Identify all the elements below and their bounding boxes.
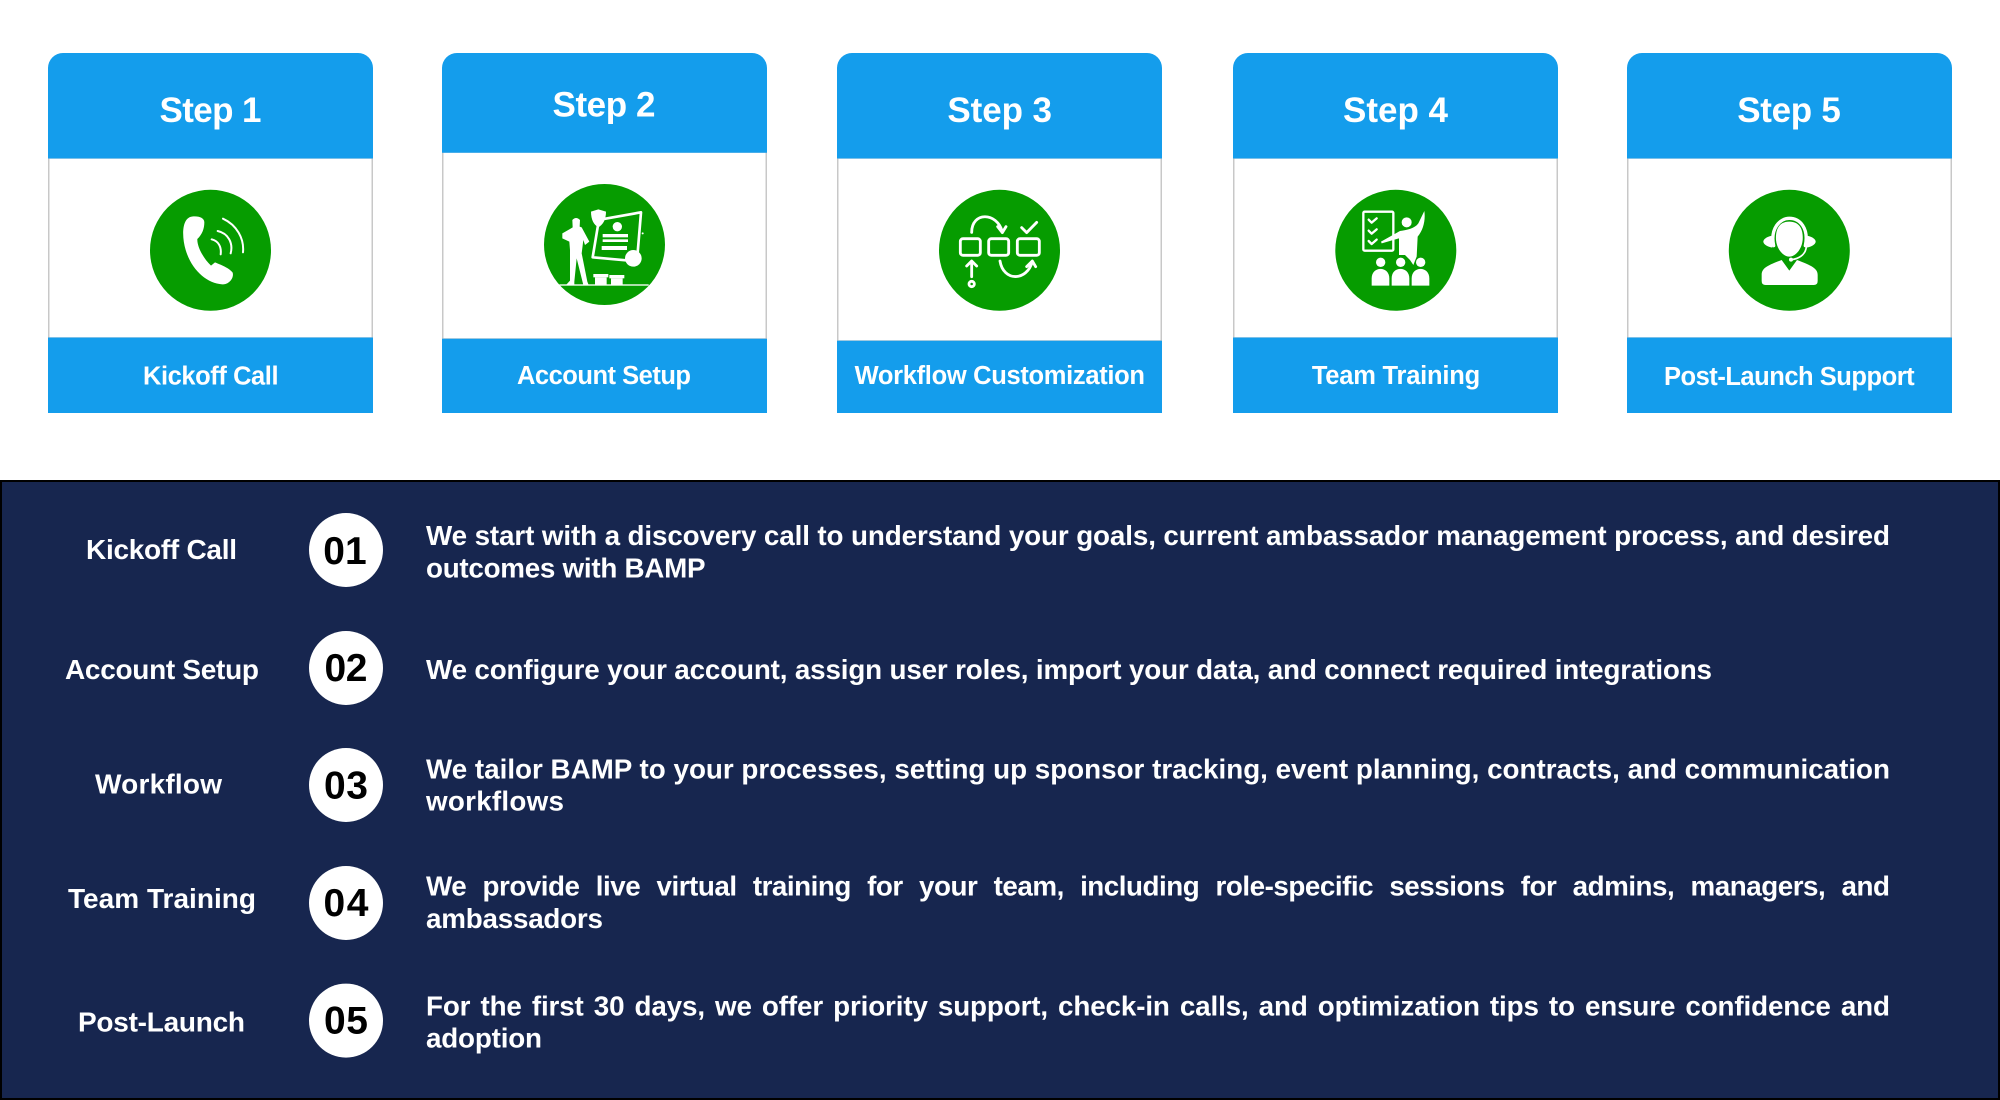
step 5 footer [1627,338,1952,413]
row 4: team training [68,866,1890,940]
panel: step 1 card [48,53,373,413]
row 1 description: We start with a discovery call to understand your goals, current ambassador management process, and desired [426,520,1890,551]
row 4 label: Team Training [68,883,256,914]
step 3 header: Step 3 [947,91,1052,130]
step 5 footer: Post-Launch Support [1664,363,1915,391]
step 4 footer [1233,338,1558,413]
step 3 footer [837,341,1162,413]
step 3 header [837,53,1162,158]
icon: workflow [939,190,1060,311]
row 5 description: For the first 30 days, we offer priority support, check-in calls, and optimization tips to ensure confidence and [426,990,1890,1021]
step 4 footer: Team Training [1312,362,1480,390]
row 3 description [425,753,1890,816]
row 5 number badge: 05 [324,1000,368,1042]
row 4 number badge: 04 [324,882,369,925]
icon: account setup [544,184,665,305]
step 2 footer [442,339,767,413]
row 1 number badge [309,513,383,587]
icon: team training [1335,190,1456,311]
row 2: account setup [65,631,1712,705]
row 5: post-launch [78,984,1890,1058]
row 4 description: We provide live virtual training for your team, including role-specific sessions for admins, managers, and [426,871,1890,902]
panel: step 3 card [837,53,1162,413]
row 3 description: We tailor BAMP to your processes, setting up sponsor tracking, event planning, contracts, and communication [426,753,1890,784]
step 1 footer: Kickoff Call [143,362,279,390]
step 4 header [1233,53,1558,158]
icon: phone call [150,190,271,311]
step 5 header: Step 5 [1737,91,1841,130]
row 2 number badge: 02 [324,647,368,690]
row 1 description: outcomes with BAMP [426,553,706,584]
step 5 header [1627,53,1952,158]
row 2 label: Account Setup [65,654,259,685]
row 3 description: workflows [425,786,564,816]
row 3 label: Workflow [95,769,222,800]
row 2 number badge [309,631,383,705]
panel: step 2 card [442,53,767,413]
row 1 label: Kickoff Call [86,534,237,565]
row 1 number badge: 01 [323,530,367,573]
row 1 description [426,520,1890,584]
step 3 footer: Workflow Customization [855,362,1145,390]
row 3 number badge: 03 [324,764,368,808]
row 3: workflow [95,748,1890,822]
step 2 footer: Account Setup [517,362,691,390]
step 1 header: Step 1 [160,91,262,130]
row 2 description: We configure your account, assign user roles, import your data, and connect required integrations [426,654,1712,685]
panel: step 4 card [1233,53,1558,413]
icon: support agent [1729,190,1850,311]
step 1 footer [48,338,373,413]
step 1 header [48,53,373,158]
row 5 description: adoption [426,1022,542,1054]
row 5 label: Post-Launch [78,1006,245,1038]
row 5 description [426,990,1890,1054]
row 4 description [426,871,1890,934]
step 4 header: Step 4 [1343,91,1449,130]
panel: process details [1,481,1999,1099]
row 5 number badge [309,984,383,1058]
step 2 header: Step 2 [552,86,656,125]
step 2 header [442,53,767,153]
row 1: kickoff call [86,513,1890,587]
row 4 number badge [309,866,383,940]
panel: step 5 card [1627,53,1952,413]
row 4 description: ambassadors [426,903,603,934]
row 3 number badge [309,748,383,822]
